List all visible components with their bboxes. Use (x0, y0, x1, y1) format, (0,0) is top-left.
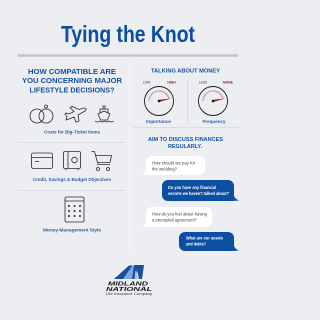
logo mountains (114, 265, 144, 279)
gauge: frequency (198, 80, 234, 124)
chat bubble: assets and debts: What are our assets (186, 236, 224, 240)
heading: aim to discuss finances (148, 137, 223, 150)
icon: airplane (65, 106, 86, 122)
chat bubble: paying for the wedding: How should we pay for (152, 160, 196, 166)
chat bubble: financial secrets: secrets we haven't talked about? (168, 191, 229, 196)
title: Tying the Knot (61, 21, 195, 47)
label: credit and savings: Credit, Savings & Budget Objectives (33, 177, 111, 182)
logo wordmark (106, 282, 152, 293)
heading: compatibility question: YOU CONCERNING MAJOR (22, 76, 123, 85)
chat bubble: assets and debts (179, 232, 239, 251)
panel: talking about money (133, 68, 240, 128)
gauge: importance: Importance (146, 119, 171, 124)
icon: wedding rings (30, 105, 53, 123)
heading: talking about money: TALKING ABOUT MONEY (151, 68, 220, 74)
chat bubble: financial secrets: Do you have any financial (168, 185, 216, 190)
gauge: importance (143, 80, 176, 124)
heading: compatibility question: HOW COMPATIBLE ARE (28, 67, 116, 76)
icon: shopping cart (92, 152, 112, 170)
chat bubble: paying for the wedding (142, 156, 205, 175)
panel: lifestyle decisions (18, 67, 125, 234)
heading: compatibility question (22, 67, 123, 95)
logo: Midland National (106, 265, 153, 296)
logo tagline: Life Insurance Company (106, 292, 153, 296)
icon: cruise ship (95, 106, 114, 122)
logo wordmark: MIDLAND (108, 282, 148, 288)
panel: aim to discuss finances (142, 137, 239, 251)
icon: safe (64, 152, 80, 170)
gauge: frequency: LESS (199, 80, 208, 84)
gauge: frequency: Frequency (202, 119, 226, 124)
icon: calculator (65, 197, 84, 222)
chat bubble: paying for the wedding: the wedding? (152, 166, 178, 172)
gauge: importance: LOW (143, 80, 151, 84)
heading: aim to discuss finances: AIM TO DISCUSS FINANCES (148, 137, 223, 143)
chat bubble: financial secrets (162, 180, 239, 201)
logo wordmark: NATIONAL (106, 287, 152, 293)
chat bubble: assets and debts: and debts? (186, 242, 206, 246)
chat bubble: prenuptial agreement: How do you feel about having (152, 212, 208, 216)
chat bubble: prenuptial agreement: a prenuptial agreement? (152, 218, 198, 222)
heading: compatibility question: LIFESTYLE DECISIONS? (30, 86, 115, 95)
label: money-management style: Money-Management Style (43, 228, 101, 234)
gauge: frequency: MORE (223, 80, 234, 84)
gauge: importance: HIGH (167, 80, 176, 84)
chat bubble: prenuptial agreement (142, 207, 212, 227)
label: big-ticket costs: Costs for Big-Ticket Items (44, 130, 100, 134)
icon: credit card (32, 153, 52, 168)
heading: aim to discuss finances: REGULARLY. (168, 144, 202, 150)
